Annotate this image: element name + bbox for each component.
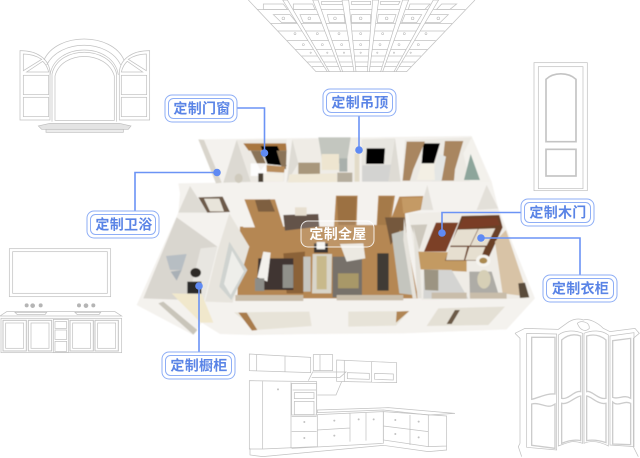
panel: 3D floor plan [137,136,535,335]
label: 定制全屋: 定制全屋 [309,226,367,242]
room: top bedroom 3 [362,138,401,182]
room: master bedroom [408,210,529,300]
label: 定制吊顶: 定制吊顶 [331,94,389,110]
icon: european wardrobe line drawing [515,319,639,457]
label: 定制橱柜: 定制橱柜 [170,358,228,374]
icon: bathroom vanity and mirror line drawing [0,249,122,353]
top-left wall strip [198,139,222,183]
room: top bedroom 2 [287,137,360,183]
room: top bedroom 1 [223,139,287,183]
room: bathroom [143,217,217,335]
icon: arched window line drawing [20,39,150,132]
outer walls [137,136,535,335]
icon: panel door line drawing [534,63,587,191]
connector: 定制吊顶 [355,116,363,154]
room: living and dining area [205,196,423,303]
icon: coffered ceiling line drawing [248,0,475,72]
connector: 定制木门 [438,212,522,237]
label: 定制门窗: 定制门窗 [173,100,231,116]
connector: 定制门窗 [237,108,268,157]
connector: 定制橱柜 [195,282,203,352]
label: 定制衣柜 [543,275,617,302]
icon: kitchen cabinets line drawing [249,354,455,457]
label: 定制木门 [521,199,594,226]
label: 定制木门: 定制木门 [529,204,587,220]
bottom windows with curtains [234,307,505,331]
label: 定制卫浴: 定制卫浴 [95,216,153,232]
connector: 定制卫浴 [135,169,221,211]
label: 定制橱柜 [162,352,235,379]
connector: 定制衣柜 [477,234,580,276]
room: hallway walls [178,185,498,213]
label: 定制全屋 [301,221,374,247]
label: 定制门窗 [165,95,237,122]
room: top bedroom 4 [402,137,489,182]
label: 定制卫浴 [87,211,159,238]
label: 定制吊顶 [323,89,396,116]
label: 定制衣柜: 定制衣柜 [552,280,609,296]
